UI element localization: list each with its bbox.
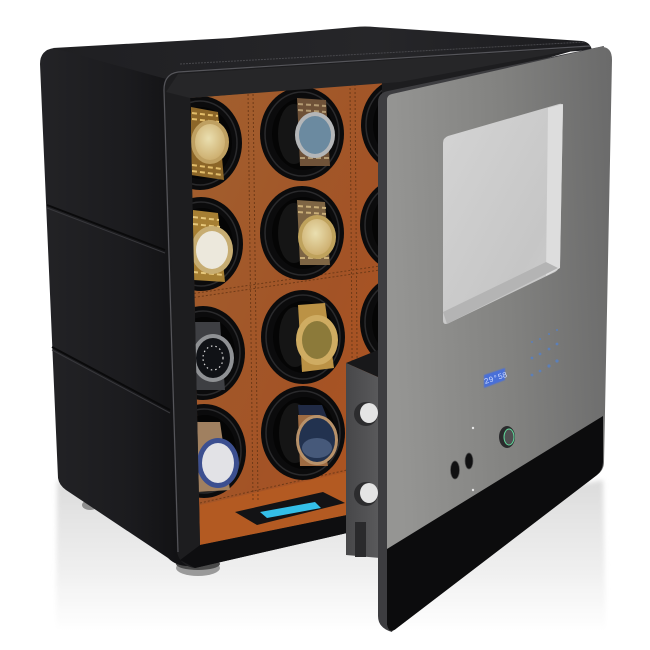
- winder pods: [190, 84, 382, 498]
- sensor holes: [450, 453, 473, 479]
- left side leather: [40, 48, 188, 566]
- floor reflection: [56, 480, 606, 640]
- keypad dots: [531, 329, 559, 376]
- watch 8 navy dial: [296, 405, 338, 466]
- inner top frame: [166, 47, 590, 98]
- black lower band: [387, 416, 603, 631]
- viewing window: [443, 104, 563, 324]
- cabinet body: [40, 26, 592, 576]
- lock bolt 1: [354, 402, 378, 426]
- side stitching seams: [47, 42, 585, 413]
- watch 3 steel black dial: [192, 322, 234, 390]
- inner left frame: [166, 88, 200, 560]
- latch: [355, 522, 366, 557]
- door bracket: [346, 350, 380, 558]
- watch 6 champagne dial: [297, 200, 336, 265]
- fingerprint button: [499, 426, 515, 448]
- top leather: [53, 26, 592, 80]
- temperature display: 29°58: [483, 371, 509, 387]
- frame highlight: [164, 46, 590, 552]
- interior leather panel: [158, 47, 590, 568]
- glass face: [387, 47, 612, 631]
- front frame: [163, 46, 590, 568]
- floor of interior: [200, 472, 347, 545]
- feet: [82, 500, 220, 576]
- lock bolt 2: [354, 482, 378, 506]
- window bottom bevel: [443, 262, 558, 324]
- watch 7 full gold: [296, 303, 338, 372]
- door: [378, 46, 612, 632]
- LCD plate: [235, 492, 345, 525]
- stitching: [190, 84, 380, 503]
- watch 2 gold white dial: [191, 210, 233, 282]
- indicator specks: [472, 427, 474, 491]
- front lip: [180, 515, 347, 568]
- window side bevel: [546, 104, 563, 276]
- door edge: [378, 46, 604, 632]
- watch 5 blue dial: [295, 98, 335, 166]
- LCD screen: [260, 502, 321, 518]
- watch 4 blue bezel: [197, 422, 239, 492]
- watch 1 gold: [191, 107, 229, 180]
